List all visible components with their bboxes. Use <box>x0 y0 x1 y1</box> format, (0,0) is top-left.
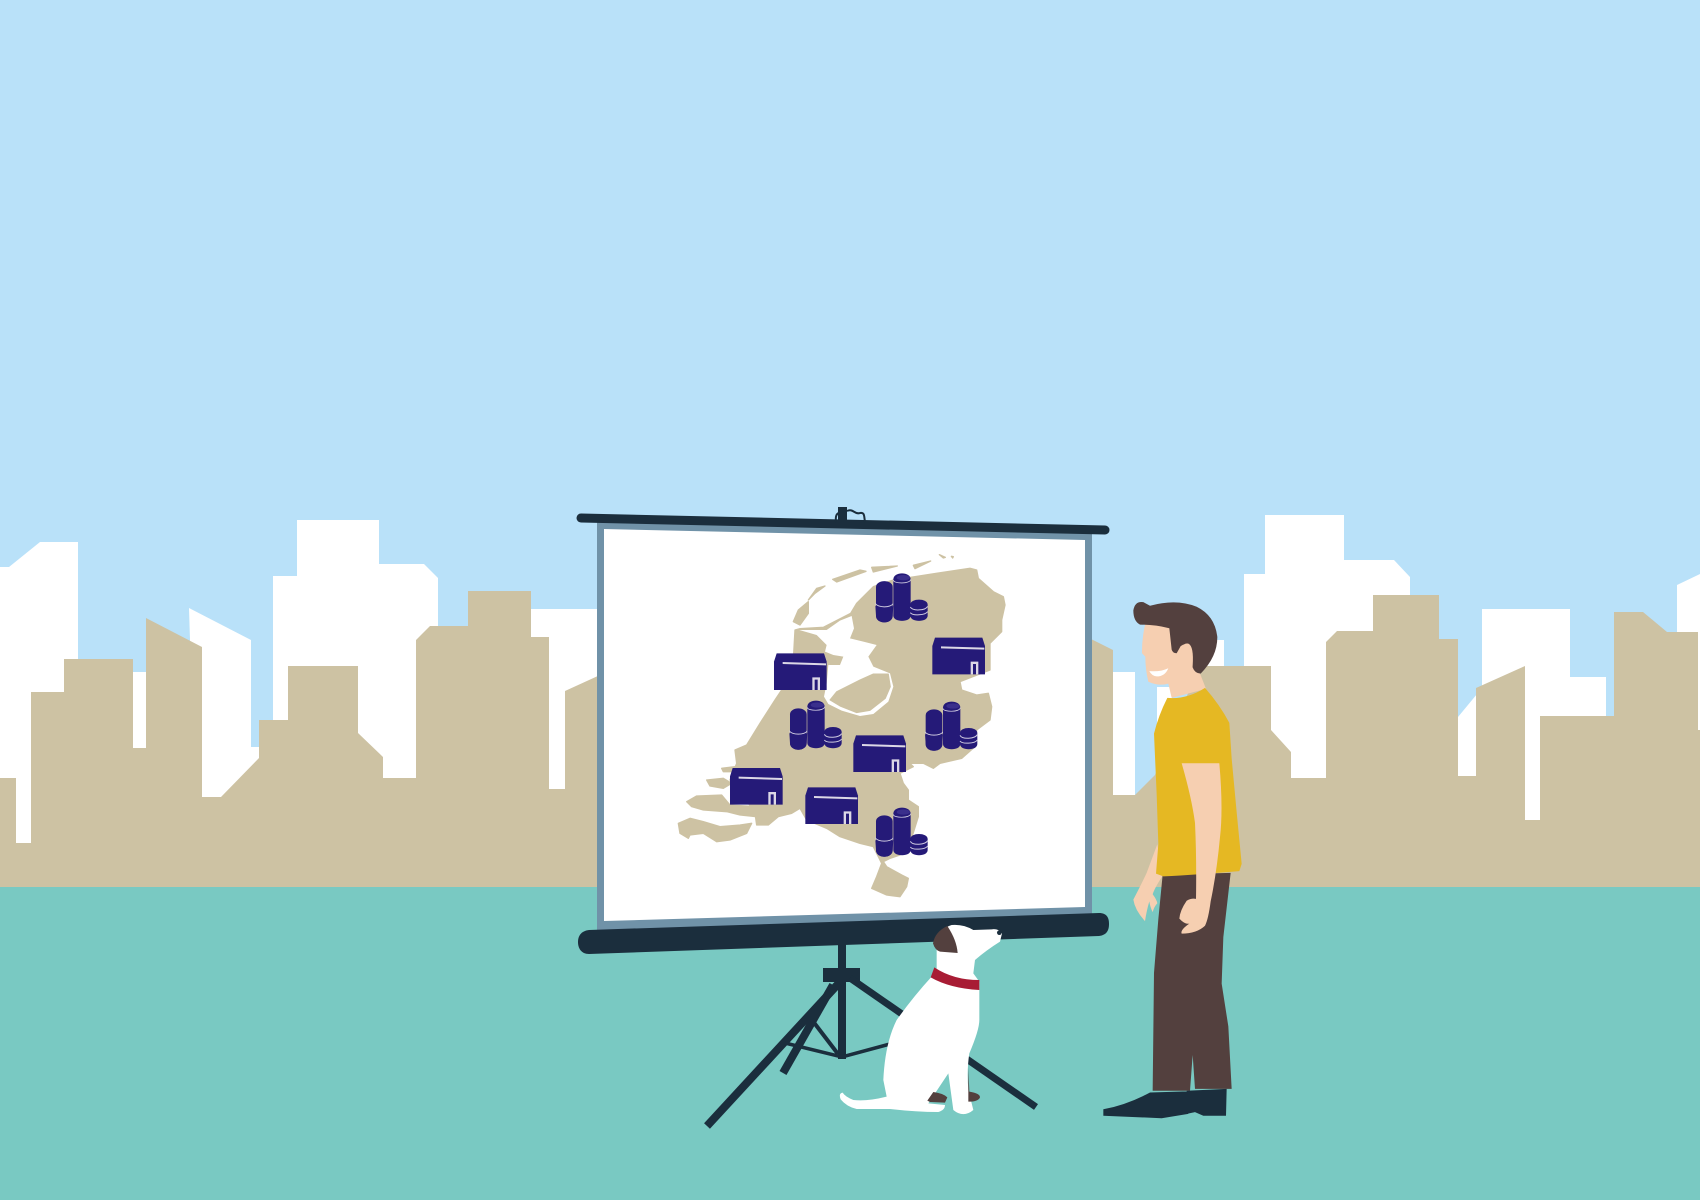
sand skyline left <box>0 591 600 890</box>
map of the Netherlands <box>678 555 1005 897</box>
bottom roller <box>578 913 1109 954</box>
IJsselmeer water <box>799 616 893 716</box>
shirt <box>1154 688 1242 876</box>
top bar <box>581 518 1105 530</box>
right arm <box>1179 763 1222 934</box>
icon: warehouse <box>774 653 827 690</box>
icon: coin stacks <box>875 808 928 857</box>
tripod stand <box>707 940 1036 1126</box>
smile <box>1149 668 1168 676</box>
white skyline right <box>1112 515 1700 830</box>
shoes <box>1103 1089 1227 1118</box>
mainland <box>730 568 1005 897</box>
projection screen <box>578 507 1109 954</box>
dog collar <box>931 967 979 990</box>
dog nose <box>997 930 1002 935</box>
man <box>1103 602 1242 1118</box>
screen surface <box>604 529 1085 921</box>
icon: warehouse <box>853 735 906 772</box>
head and neck <box>1142 623 1206 698</box>
icon: warehouse <box>730 768 783 805</box>
trousers <box>1153 873 1232 1091</box>
Flevoland <box>830 674 890 713</box>
dog back legs <box>927 1067 980 1103</box>
left arm <box>1133 844 1163 921</box>
dog body <box>840 925 1002 1114</box>
dog ear <box>933 926 958 953</box>
icon: coin stacks <box>875 573 928 622</box>
icon: coin stacks <box>925 702 977 751</box>
screen frame <box>597 519 1092 932</box>
Zeeland islands <box>707 778 732 788</box>
dog <box>840 925 1002 1114</box>
sand skyline right <box>1085 595 1700 890</box>
top clip and cable <box>838 507 847 522</box>
hair <box>1133 602 1217 674</box>
icon: warehouse <box>805 787 858 824</box>
ground <box>0 887 1700 1200</box>
white skyline left <box>0 520 600 860</box>
icon: coin stacks <box>789 701 842 750</box>
icon: warehouse <box>932 638 985 674</box>
Wadden islands <box>793 602 808 625</box>
ear <box>1179 643 1193 666</box>
